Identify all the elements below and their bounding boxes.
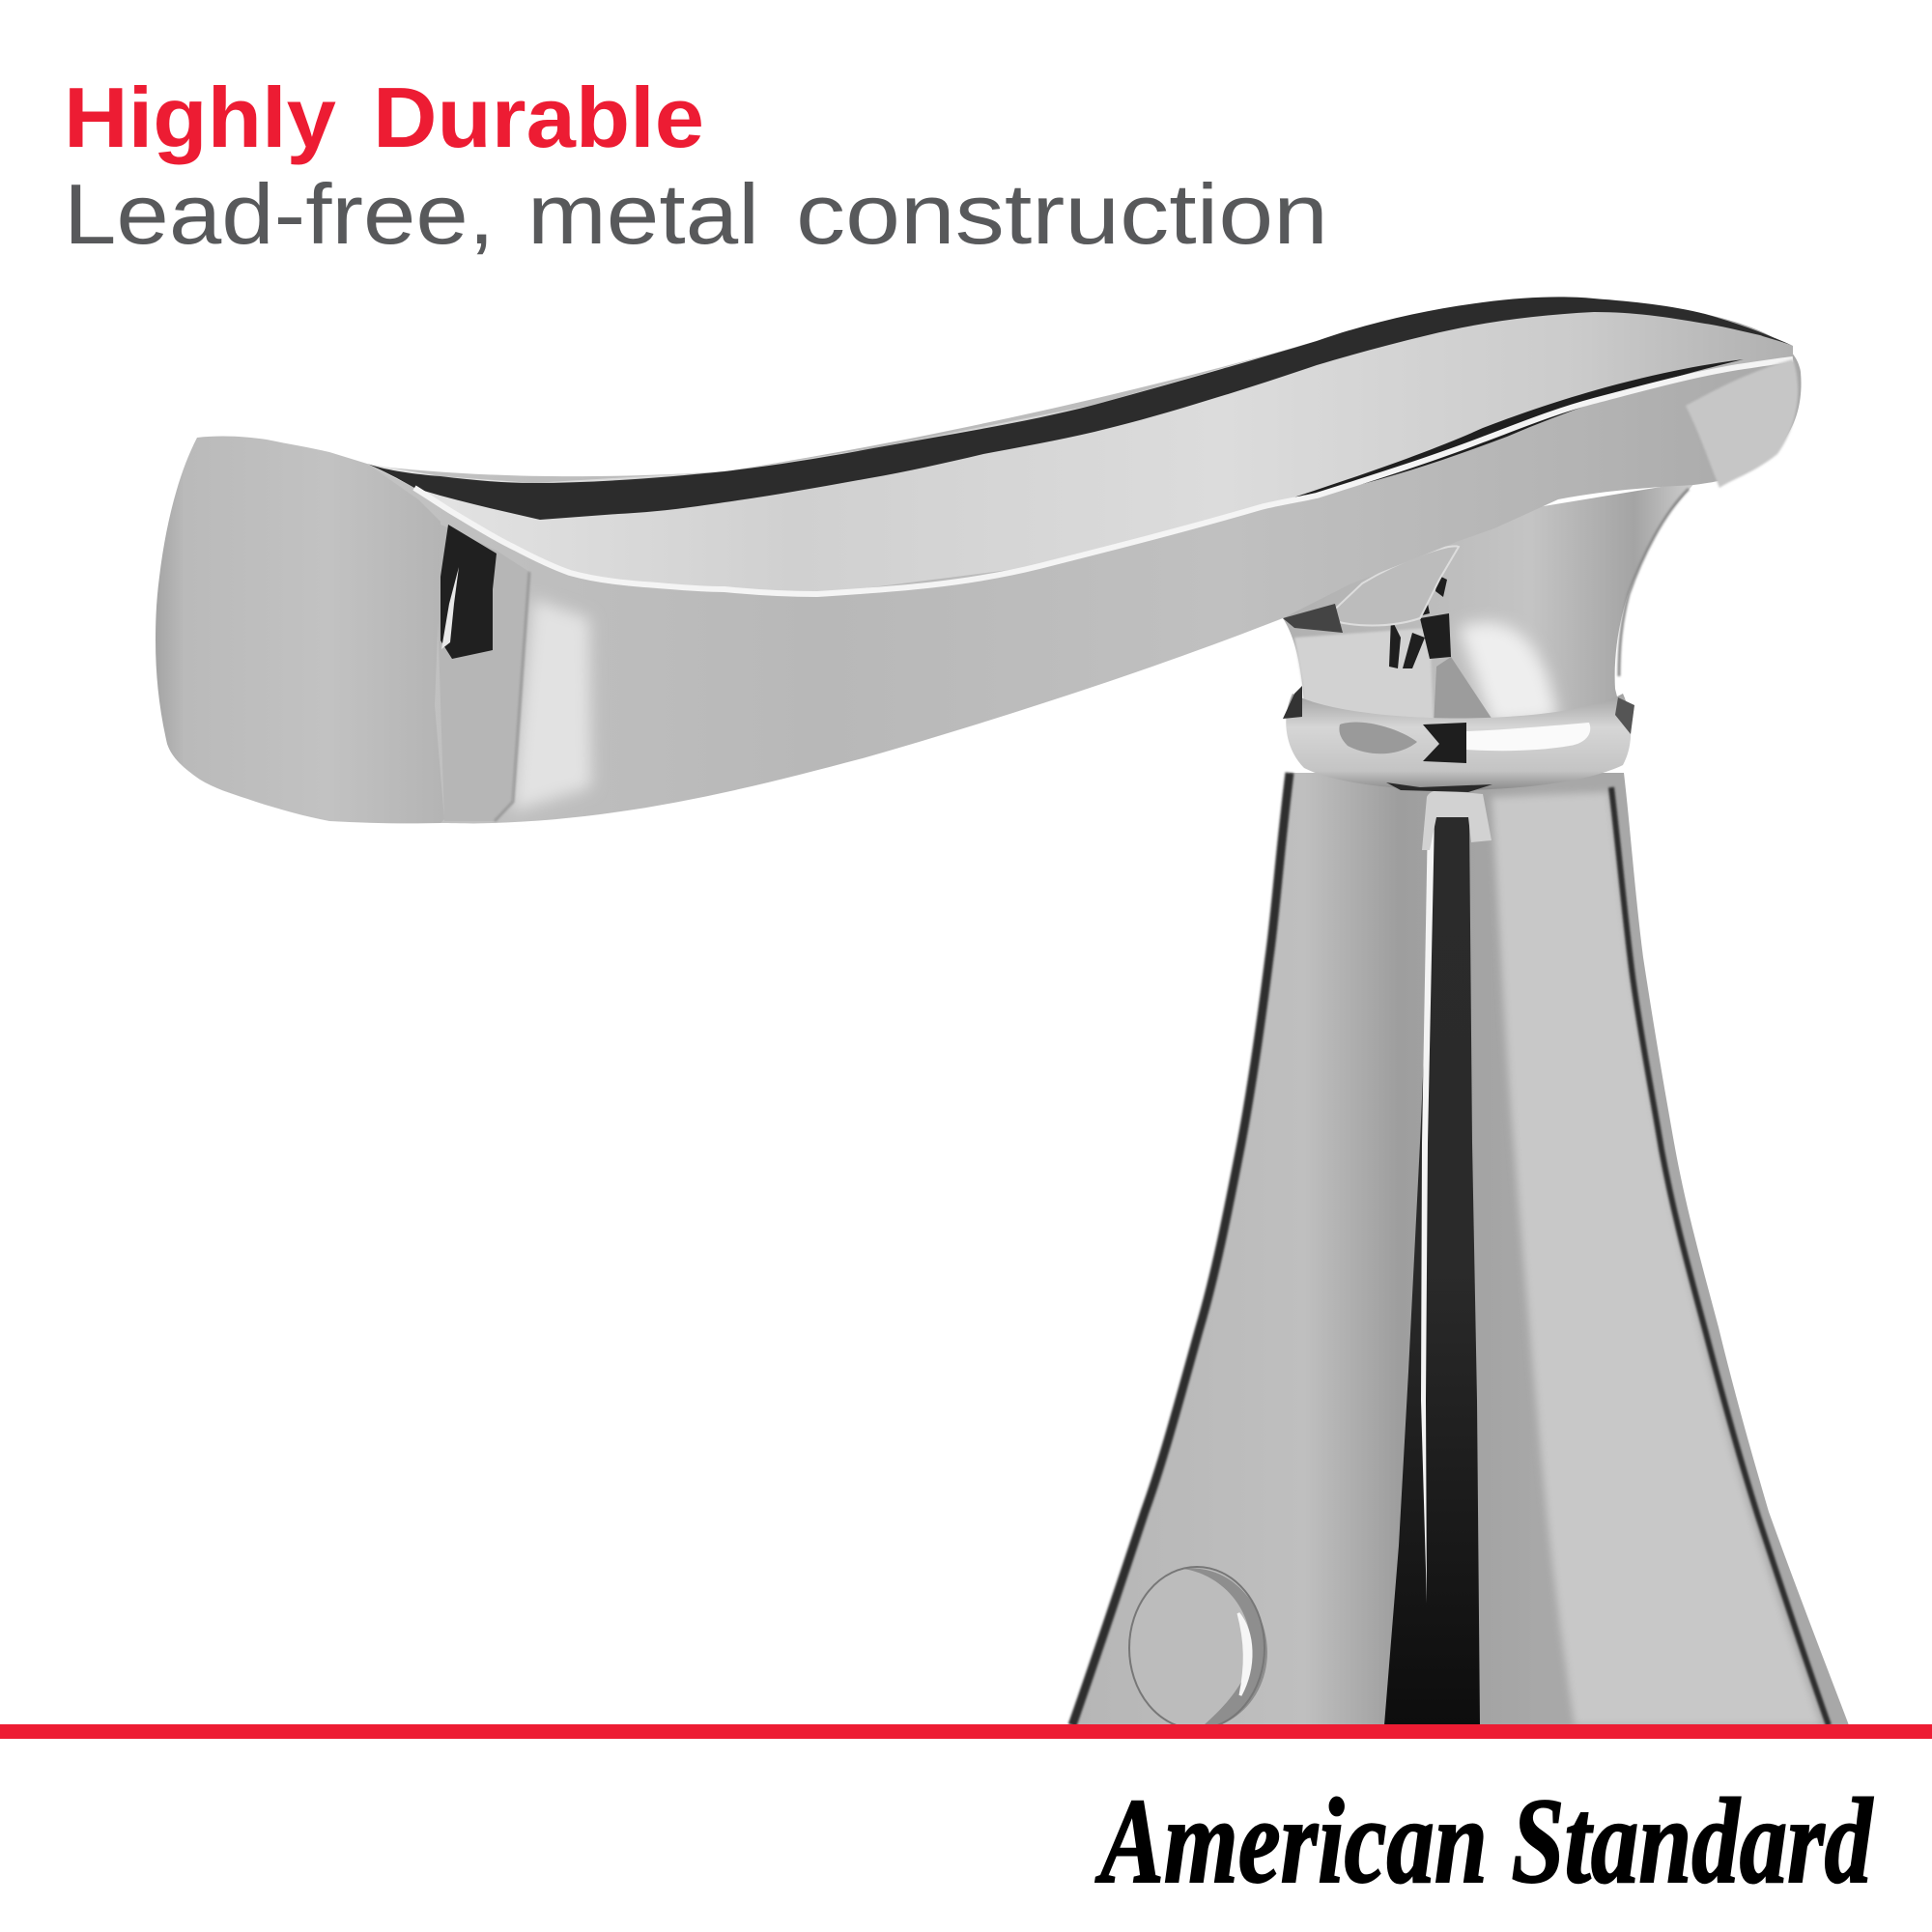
neck triangle shade [1434, 657, 1494, 726]
white rim highlight [414, 359, 1793, 594]
neck bright centre [1459, 622, 1557, 724]
arm lower soft highlight [512, 599, 591, 811]
ring glint left [1339, 723, 1417, 753]
overflow button [1129, 1567, 1267, 1729]
red divider bar [0, 1724, 1932, 1739]
dark top reflection [367, 297, 1793, 520]
lever arm [156, 297, 1802, 823]
ring lower dark line [1386, 782, 1492, 792]
left edge shadow [1072, 773, 1290, 1725]
cap dark streak [440, 525, 497, 659]
ring right dark notch [1615, 697, 1634, 734]
faucet stem neck and ring [1283, 481, 1696, 792]
neck jagged reflections [1381, 570, 1451, 668]
subheading: Lead-free, metal construction [64, 166, 1328, 262]
upper lobe [367, 298, 1793, 594]
heading: Highly Durable [64, 70, 704, 165]
strip top light cap [1422, 790, 1492, 850]
collar ring [1286, 694, 1631, 790]
neck left light [1294, 628, 1434, 724]
right arm end shading [1686, 359, 1798, 488]
neck shoulder light glint [1325, 546, 1459, 626]
faucet body base [1072, 773, 1849, 1729]
right edge shadow [1611, 787, 1829, 1725]
ring glint centre [1423, 723, 1466, 763]
white highlight line [1421, 816, 1435, 1604]
heading: Highly Durable: Highly [64, 70, 336, 165]
subheading: Lead-free, metal construction: construction [796, 166, 1328, 262]
central dark reflection strip [1384, 816, 1480, 1725]
right body light panel [1492, 792, 1822, 1725]
subheading: Lead-free, metal construction: metal [527, 166, 759, 262]
ring white highlight [1466, 723, 1590, 751]
cap side strip edge [495, 572, 529, 821]
subheading: Lead-free, metal construction: Lead-free, [64, 166, 495, 262]
heading: Highly Durable: Durable [373, 70, 704, 165]
end cap [156, 437, 444, 823]
neck body [1283, 481, 1696, 720]
cap side reflection strip [435, 522, 529, 821]
arm lower body [290, 301, 1802, 823]
streak white sliver [441, 567, 459, 649]
dark thin rim reflection [1285, 359, 1744, 500]
ring left dark notch [1283, 686, 1302, 719]
right arm stem edge [1619, 489, 1689, 676]
faucet handle illustration [156, 297, 1849, 1729]
neck left dark corner [1283, 604, 1343, 633]
